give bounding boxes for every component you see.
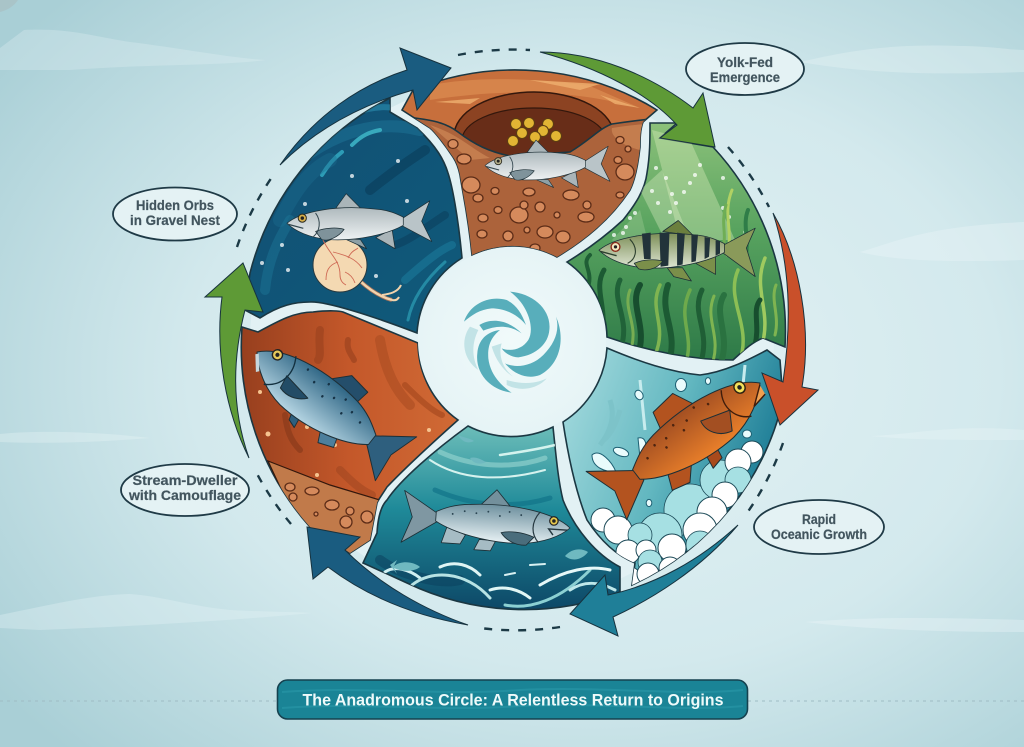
label: Stream-Dweller with Camouflage: with Camouflage — [128, 488, 242, 503]
centre disc with swirl logo — [418, 247, 606, 435]
arrow: green top right — [540, 52, 715, 147]
label: Hidden Orbs in Gravel Nest: Hidden Orbs — [136, 198, 214, 213]
arrow: dark blue top left — [280, 48, 451, 165]
icon: yolk sac with tether — [313, 238, 401, 300]
icon: small background fish — [390, 435, 588, 574]
panel: gravel nest cross-section — [401, 69, 658, 258]
fish: orange leaping salmon — [581, 347, 784, 531]
label: Yolk-Fed Emergence — [686, 43, 804, 95]
white-water foam — [591, 441, 763, 589]
ocean waves — [385, 564, 615, 606]
label: Hidden Orbs in Gravel Nest: in Gravel Nest — [130, 213, 220, 228]
panel: rapid growth (leaping over rapids) — [563, 347, 784, 589]
fish: camouflaged blue salmon — [235, 320, 421, 491]
gravel pebbles — [448, 136, 634, 252]
title banner: The Anadromous Circle: A Relentless Return to Origins — [302, 692, 724, 710]
label: Yolk-Fed Emergence: Emergence — [710, 70, 780, 85]
label: Stream-Dweller with Camouflage: Stream-Dweller — [132, 473, 238, 488]
fish: silver fry in gravel — [485, 140, 610, 188]
label: Rapid Oceanic Growth: Rapid — [802, 512, 836, 527]
label: Rapid Oceanic Growth: Oceanic Growth — [771, 527, 867, 542]
panel: oceanic phase — [363, 426, 620, 610]
splash droplets — [592, 378, 752, 507]
arrow: green left — [205, 263, 263, 458]
icon: swirl — [464, 292, 561, 393]
gravel nest pit — [454, 91, 612, 134]
label: Stream-Dweller with Camouflage — [121, 464, 249, 516]
label: Rapid Oceanic Growth — [754, 500, 884, 554]
riverbed sand and pebbles — [268, 461, 380, 560]
icon: golden egg cluster — [508, 118, 562, 146]
title banner — [278, 680, 748, 719]
arrow: teal bottom right — [570, 525, 738, 636]
arrow: dark blue bottom left — [307, 527, 468, 625]
fish: silver alevin — [287, 194, 432, 249]
label: Hidden Orbs in Gravel Nest — [113, 188, 237, 240]
panel: yolk-fed emergence (green weeds) — [567, 123, 785, 365]
fish: sea-phase salmon — [401, 483, 572, 556]
arrow: red right — [762, 213, 818, 425]
fish: striped parr — [599, 220, 755, 281]
panel: stream dweller (red riverbed) — [235, 311, 458, 560]
wheel backing — [250, 78, 774, 602]
label: Yolk-Fed Emergence: Yolk-Fed — [717, 55, 773, 70]
panel: hidden orbs (deep blue water with alevin) — [245, 98, 462, 333]
seaweed — [586, 190, 776, 365]
dashed orbit ring segments — [237, 50, 783, 630]
